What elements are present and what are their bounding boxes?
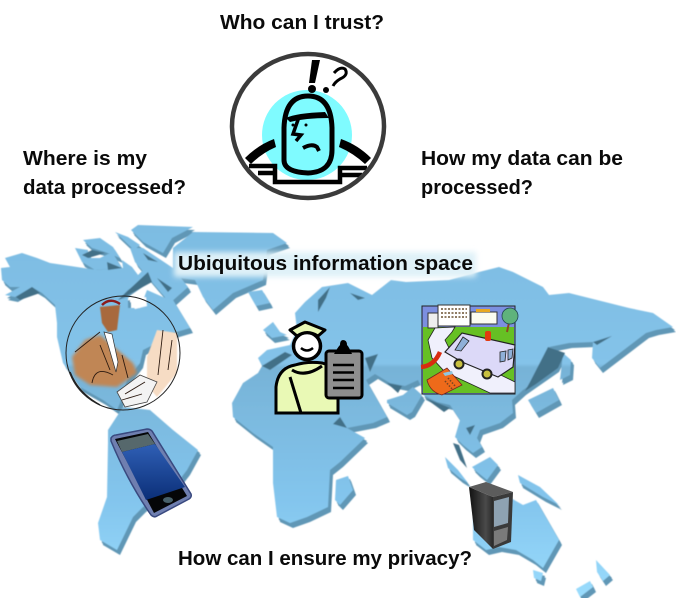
question: how my data can be processed	[421, 148, 623, 199]
question: where is my data processed: data processed?	[23, 177, 186, 199]
question: how can I ensure my privacy: How can I ensure my privacy?	[178, 548, 472, 570]
question: who can I trust: Who can I trust?	[220, 12, 384, 34]
heading: ubiquitous information space: Ubiquitous information space	[178, 253, 473, 275]
icon: ambulance and telephone	[421, 305, 518, 395]
icon: nurse with clipboard	[276, 322, 362, 413]
question: how my data can be processed: processed?	[421, 177, 533, 199]
question: how my data can be processed: How my data can be	[421, 148, 623, 170]
question: where is my data processed	[23, 148, 186, 199]
question: where is my data processed: Where is my	[23, 148, 148, 170]
icon: office worker at computer	[66, 296, 180, 410]
icon: puzzled user in circle	[232, 54, 384, 198]
icon: server tower	[469, 482, 513, 549]
icon: smartphone	[111, 429, 191, 517]
world map	[1, 225, 676, 598]
label background: ubiquitous information space	[174, 252, 476, 277]
